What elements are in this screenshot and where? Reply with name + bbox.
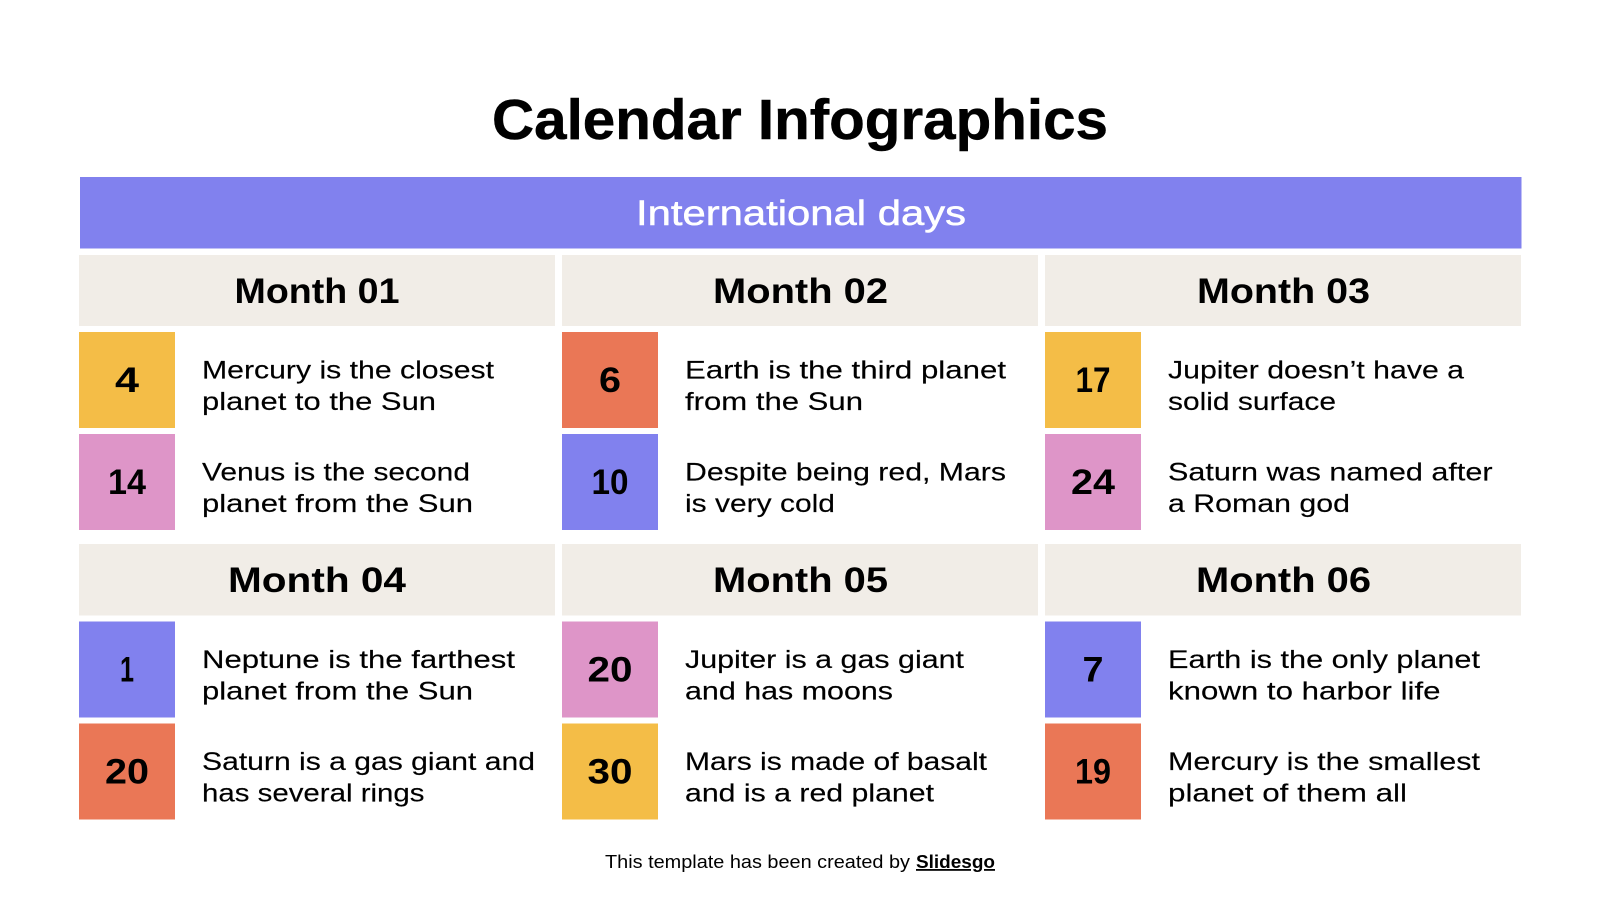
heading: Month 03: Month 03 bbox=[1197, 272, 1370, 311]
entry: day 17 bbox=[1045, 332, 1464, 428]
banner: International days bbox=[80, 177, 1522, 248]
entry: day 24: a Roman god bbox=[1168, 490, 1350, 518]
heading: Month 05 bbox=[562, 544, 1038, 616]
entry: day 7: known to harbor life bbox=[1168, 678, 1440, 706]
heading: Month 02: Month 02 bbox=[713, 272, 888, 311]
entry: day 14: 14 bbox=[108, 463, 147, 502]
heading: Month 01 bbox=[79, 255, 555, 326]
entry: day 1: planet from the Sun bbox=[202, 678, 473, 706]
entry: day 20: Jupiter is a gas giant bbox=[685, 646, 964, 674]
entry: day 20: 20 bbox=[588, 650, 632, 690]
entry: day 30: Mars is made of basalt bbox=[685, 748, 987, 776]
entry: day 24: 24 bbox=[1071, 463, 1116, 502]
entry: day 7: Earth is the only planet bbox=[1168, 646, 1480, 674]
entry: day 10: 10 bbox=[592, 463, 628, 502]
panel: Month 04 bbox=[79, 544, 555, 820]
entry: day 20: Saturn is a gas giant and bbox=[202, 748, 535, 776]
entry: day 4: planet to the Sun bbox=[202, 388, 436, 416]
entry: day 10: is very cold bbox=[685, 490, 835, 518]
entry: day 4: 4 bbox=[115, 361, 140, 400]
banner: International days: International days bbox=[636, 194, 966, 233]
entry: day 1: Neptune is the farthest bbox=[202, 646, 515, 674]
entry: day 24 bbox=[1045, 434, 1492, 530]
entry: day 17: Jupiter doesn’t have a bbox=[1168, 356, 1464, 384]
entry: day 24: Saturn was named after bbox=[1168, 458, 1492, 486]
panel: Month 03 bbox=[1045, 255, 1521, 530]
entry: day 4: Mercury is the closest bbox=[202, 356, 494, 384]
entry: day 30 bbox=[562, 724, 987, 820]
heading: Month 04 bbox=[79, 544, 555, 616]
entry: day 10: Despite being red, Mars bbox=[685, 458, 1006, 486]
credit line: This template has been created by bbox=[605, 852, 910, 872]
panel: Month 02 bbox=[562, 255, 1038, 530]
entry: day 6 bbox=[562, 332, 1006, 428]
heading: Month 01: Month 01 bbox=[234, 272, 400, 311]
entry: day 10 bbox=[562, 434, 1006, 530]
entry: day 19 bbox=[1045, 724, 1480, 820]
entry: day 6: from the Sun bbox=[685, 388, 863, 416]
credit line: Slidesgo bbox=[916, 852, 995, 872]
entry: day 14: Venus is the second bbox=[202, 458, 470, 486]
heading: Month 03 bbox=[1045, 255, 1521, 326]
heading: Month 04: Month 04 bbox=[228, 561, 407, 600]
heading: Month 06: Month 06 bbox=[1196, 561, 1371, 600]
entry: day 7: 7 bbox=[1082, 650, 1104, 690]
entry: day 20: 20 bbox=[105, 752, 149, 792]
entry: day 20 bbox=[79, 724, 535, 820]
entry: day 19: planet of them all bbox=[1168, 780, 1407, 808]
heading: Month 02 bbox=[562, 255, 1038, 326]
entry: day 4 bbox=[79, 332, 494, 428]
title: Calendar Infographics bbox=[492, 88, 1108, 152]
panel: Month 01 bbox=[79, 255, 555, 530]
entry: day 6: Earth is the third planet bbox=[685, 356, 1006, 384]
entry: day 17: solid surface bbox=[1168, 388, 1336, 416]
panel: Month 05 bbox=[562, 544, 1038, 820]
entry: day 14 bbox=[79, 434, 473, 530]
entry: day 20 bbox=[562, 622, 964, 718]
entry: day 14: planet from the Sun bbox=[202, 490, 473, 518]
heading: Month 05: Month 05 bbox=[713, 561, 888, 600]
entry: day 19: Mercury is the smallest bbox=[1168, 748, 1480, 776]
entry: day 7 bbox=[1045, 622, 1480, 718]
entry: day 19: 19 bbox=[1075, 752, 1111, 792]
entry: day 1: 1 bbox=[120, 650, 134, 690]
entry: day 30: 30 bbox=[588, 752, 632, 792]
entry: day 20: and has moons bbox=[685, 678, 893, 706]
entry: day 1 bbox=[79, 622, 515, 718]
entry: day 17: 17 bbox=[1076, 361, 1110, 400]
entry: day 30: and is a red planet bbox=[685, 780, 934, 808]
entry: day 20: has several rings bbox=[202, 780, 424, 808]
heading: Month 06 bbox=[1045, 544, 1521, 616]
panel: Month 06 bbox=[1045, 544, 1521, 820]
entry: day 6: 6 bbox=[599, 361, 621, 400]
